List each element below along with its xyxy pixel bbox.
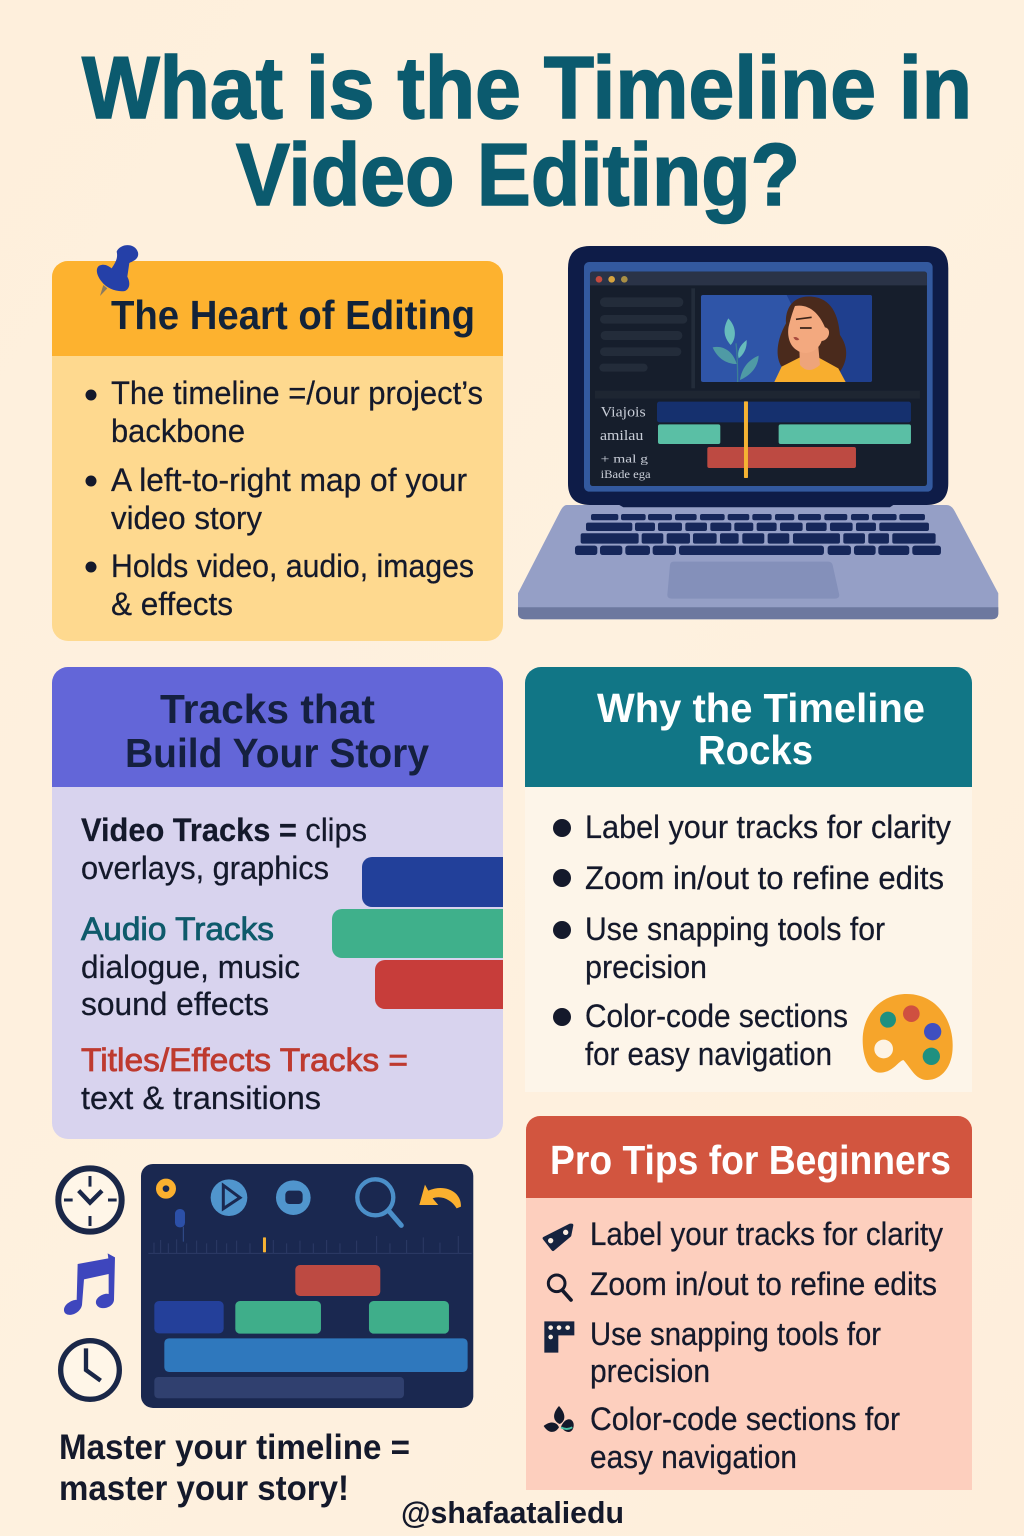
text: audio tracks: dialogue, music — [81, 949, 300, 985]
panel: why the timeline rocks — [525, 667, 972, 1092]
track labels: amilau — [600, 428, 644, 444]
closing message: master your story! — [59, 1469, 349, 1508]
screen — [584, 262, 933, 492]
panel header: tracks — [52, 667, 503, 787]
track bars — [332, 857, 503, 1009]
keyboard — [575, 514, 941, 555]
text: audio tracks: sound effects — [81, 986, 269, 1022]
text: audio tracks: Audio Tracks — [81, 911, 274, 947]
text: audio tracks — [81, 911, 300, 1022]
title: Video Editing? — [236, 125, 800, 224]
bullet list: why: Zoom in/out to refine edits — [585, 860, 944, 896]
text: titles and effects tracks: Titles/Effects Tracks = — [81, 1042, 408, 1078]
side icons: clock, music note, clock — [58, 1168, 122, 1399]
bullet list: why: Label your tracks for clarity — [585, 809, 951, 845]
illustration: laptop with timeline — [518, 246, 998, 619]
icon: magnifier — [548, 1275, 571, 1300]
bullet list: why — [553, 809, 951, 1072]
bullet list: why: Color-code sections — [585, 998, 848, 1034]
heading: tracks that build your story: Tracks that — [160, 686, 375, 732]
heading: pro tips for beginners: Pro Tips for Beginners — [550, 1137, 951, 1183]
track labels — [600, 405, 651, 481]
ruler and playhead — [148, 1209, 472, 1253]
icon: clock — [61, 1341, 119, 1399]
clips — [154, 1265, 468, 1398]
tips list: Zoom in/out to refine edits — [590, 1266, 937, 1302]
heading: why the timeline rocks: Why the Timeline — [597, 685, 925, 731]
bullet list: heart of editing — [86, 375, 483, 622]
bullet list: heart of editing: & effects — [111, 586, 233, 622]
icon: tag — [544, 1225, 572, 1249]
bullet list: heart of editing: video story — [111, 500, 262, 536]
tips list: precision — [590, 1353, 710, 1389]
panel: mini timeline editor — [141, 1164, 473, 1408]
bullet list: heart of editing: A left-to-right map of your — [111, 462, 467, 498]
video preview — [701, 295, 872, 382]
text: video tracks: overlays, graphics — [81, 850, 329, 886]
icon: stopwatch clock — [58, 1168, 122, 1232]
icon: push pin — [97, 245, 138, 296]
heading: tracks that build your story: Build Your Story — [125, 730, 429, 776]
laptop lid — [568, 246, 948, 507]
tips list: Color-code sections for — [590, 1401, 900, 1437]
ruler — [595, 391, 920, 399]
bullet list: heart of editing: Holds video, audio, images — [111, 548, 474, 584]
tip icons — [544, 1225, 574, 1432]
icon: colour petals — [544, 1406, 574, 1432]
heading: why the timeline rocks — [597, 685, 925, 773]
heading: tracks that build your story — [125, 686, 429, 776]
title: What is the Timeline in — [82, 38, 972, 137]
bullet list: heart of editing: The timeline =/our project’s — [111, 375, 483, 411]
text: titles and effects tracks — [81, 1042, 408, 1116]
panel: the heart of editing — [52, 245, 503, 641]
bullet list: heart of editing: backbone — [111, 413, 245, 449]
icon: snapping — [544, 1321, 574, 1353]
timeline tracks — [657, 401, 911, 478]
panel header: why — [525, 667, 972, 787]
closing message: Master your timeline = — [59, 1428, 410, 1467]
text: video tracks: Video Tracks = clips — [81, 812, 367, 848]
laptop base — [518, 505, 998, 619]
heading: why the timeline rocks: Rocks — [698, 727, 813, 773]
heading: the heart of editing: The Heart of Editing — [111, 292, 475, 338]
panel: tracks that build your story — [52, 667, 503, 1139]
toolbar icons — [159, 1179, 461, 1225]
credit handle: @shafaataliedu — [401, 1495, 624, 1530]
track labels: Viajois — [601, 405, 646, 421]
text: titles and effects tracks: text & transitions — [81, 1080, 321, 1116]
tips list — [590, 1216, 943, 1475]
tips list: Use snapping tools for — [590, 1316, 881, 1352]
track labels: iBade ega — [601, 467, 651, 481]
title — [82, 38, 972, 224]
closing message — [59, 1428, 410, 1508]
panel header: pro tips — [526, 1116, 972, 1198]
track labels: + mal g — [601, 452, 648, 466]
bullet list: why: for easy navigation — [585, 1036, 832, 1072]
icon: colour palette — [863, 994, 953, 1080]
panel header: heart of editing — [52, 261, 503, 356]
bullet list: why: precision — [585, 949, 707, 985]
panel: pro tips for beginners — [526, 1116, 972, 1490]
text: video tracks — [81, 812, 367, 886]
bullet list: why: Use snapping tools for — [585, 911, 885, 947]
icon: music note — [64, 1253, 115, 1315]
tips list: easy navigation — [590, 1439, 797, 1475]
tips list: Label your tracks for clarity — [590, 1216, 943, 1252]
